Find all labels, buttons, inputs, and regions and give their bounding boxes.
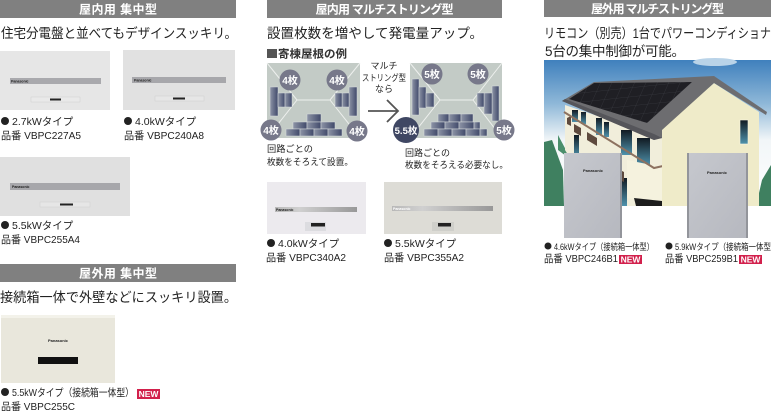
label: with multi-string xyxy=(362,61,406,94)
product: VBPC240A8 unit: Panasonic xyxy=(134,78,152,82)
cream gable wall xyxy=(662,83,759,206)
heading bar: indoor multi-string: 屋内用 マルチストリング型 xyxy=(316,2,454,16)
badge: 5 panels top right: 5枚 xyxy=(470,68,486,81)
product label: VBPC240A8 xyxy=(124,116,204,142)
caption: after xyxy=(405,147,508,170)
roof diagram: before xyxy=(260,63,368,142)
product label: VBPC255C xyxy=(1,386,134,411)
product: VBPC246B1 unit xyxy=(564,153,622,238)
product label: VBPC227A5: 2.7kWタイプ xyxy=(12,116,74,128)
badge: 4 panels bottom right: 4枚 xyxy=(349,125,365,138)
heading bar: outdoor central: 屋外用 集中型 xyxy=(79,266,157,280)
gable window xyxy=(740,120,748,144)
product label: VBPC340A2 xyxy=(266,238,346,264)
arrow xyxy=(368,100,398,122)
panel: outdoor multi-string type xyxy=(544,0,771,265)
panel: indoor central type xyxy=(0,0,237,246)
panel: indoor multi-string type xyxy=(260,0,514,264)
product label: VBPC240A8: 品番 VBPC240A8 xyxy=(124,130,204,142)
label: with multi-string: なら xyxy=(375,84,393,94)
product label: VBPC340A2: 品番 VBPC340A2 xyxy=(266,252,346,264)
heading bar: indoor central: 屋内用 集中型 xyxy=(79,2,157,16)
lead text: outdoor multi-string xyxy=(544,25,771,59)
product: VBPC355A2 unit: Panasonic xyxy=(393,207,411,211)
product label: VBPC355A2: 5.5kWタイプ xyxy=(395,238,457,250)
product label: VBPC255C: 5.5kWタイプ（接続箱一体型） xyxy=(12,386,134,399)
label: with multi-string: ストリング型 xyxy=(362,72,406,83)
product label: VBPC227A5: 品番 VBPC227A5 xyxy=(1,130,81,142)
product label: VBPC227A5 xyxy=(1,116,81,142)
heading bar: outdoor multi-string xyxy=(544,0,771,17)
product: VBPC255C unit: Panasonic xyxy=(48,338,69,343)
product: VBPC355A2 unit xyxy=(384,182,502,234)
badge: 4 panels bottom left: 4枚 xyxy=(263,124,279,137)
badge: 4 panels top left: 4枚 xyxy=(282,74,298,87)
product: VBPC259B1 unit: Panasonic xyxy=(707,170,728,175)
product: VBPC340A2 unit xyxy=(267,182,366,234)
front wall with windows xyxy=(565,105,662,206)
lead text: indoor central: 住宅分電盤と並べてもデザインスッキリ。 xyxy=(1,25,237,41)
caption: after: 枚数をそろえる必要なし。 xyxy=(405,159,508,170)
caption: before: 枚数をそろえて設置。 xyxy=(267,156,353,167)
roof diagram: after xyxy=(393,63,514,143)
badge: 4 panels top right: 4枚 xyxy=(329,74,345,87)
product label: VBPC255A4: 品番 VBPC255A4 xyxy=(1,234,80,246)
heading bar: indoor central xyxy=(0,0,236,18)
balcony xyxy=(627,160,662,205)
product label: VBPC255A4: 5.5kWタイプ xyxy=(12,220,74,232)
caption: after: 回路ごとの xyxy=(405,147,450,158)
roof xyxy=(562,76,767,140)
badge: NEW: NEW xyxy=(621,254,641,264)
product label: VBPC240A8: 4.0kWタイプ xyxy=(135,116,197,128)
product label: VBPC340A2: 4.0kWタイプ xyxy=(278,238,340,250)
caption: before xyxy=(267,143,353,167)
product: VBPC227A5 unit: Panasonic xyxy=(11,80,29,84)
product: VBPC259B1 unit xyxy=(687,153,748,238)
subheading: hip roof example: 寄棟屋根の例 xyxy=(278,46,347,60)
product: VBPC255A4 unit xyxy=(0,157,130,216)
badge: 5 panels bottom right: 5枚 xyxy=(496,124,512,137)
lead text: indoor multi-string: 設置枚数を増やして発電量アップ。 xyxy=(267,26,483,41)
product label: VBPC255A4 xyxy=(1,220,80,246)
badge: NEW: NEW xyxy=(139,389,159,399)
product: VBPC340A2 unit: Panasonic xyxy=(276,208,294,212)
product label: VBPC259B1: 品番 VBPC259B1 xyxy=(665,253,738,265)
label: with multi-string: マルチ xyxy=(370,61,398,71)
product: VBPC246B1 unit: Panasonic xyxy=(583,168,604,173)
product label: VBPC246B1 xyxy=(544,241,654,265)
trees xyxy=(544,140,564,206)
product label: VBPC355A2: 品番 VBPC355A2 xyxy=(384,252,464,264)
heading bar: outdoor central xyxy=(0,264,236,282)
product label: VBPC246B1: 4.6kWタイプ（接続箱一体型） xyxy=(554,241,654,252)
product: VBPC240A8 unit xyxy=(123,50,235,110)
lead text: outdoor central: 接続箱一体で外壁などにスッキリ設置。 xyxy=(0,289,237,305)
panel: outdoor central type xyxy=(0,264,237,411)
heading bar: outdoor multi-string: 屋外用 マルチストリング型 xyxy=(591,1,724,16)
product: VBPC227A5 unit xyxy=(0,51,110,110)
badge: 5 panels top left: 5枚 xyxy=(424,68,440,81)
caption: before: 回路ごとの xyxy=(267,143,313,154)
product label: VBPC355A2 xyxy=(384,238,464,264)
product label: VBPC259B1 xyxy=(665,241,771,265)
product: VBPC255C unit xyxy=(1,315,115,383)
lead text: outdoor multi-string: 5台の集中制御が可能。 xyxy=(545,44,685,59)
illustration: apartment with solar roof xyxy=(544,58,771,206)
badge: NEW: NEW xyxy=(741,254,761,264)
product label: VBPC246B1: 品番 VBPC246B1 xyxy=(544,253,618,265)
badge: 5.5 panels bottom left: 5.5枚 xyxy=(395,125,418,137)
heading bar: indoor multi-string xyxy=(267,0,502,18)
product: VBPC255A4 unit: Panasonic xyxy=(12,185,30,189)
balcony rail xyxy=(564,112,663,168)
